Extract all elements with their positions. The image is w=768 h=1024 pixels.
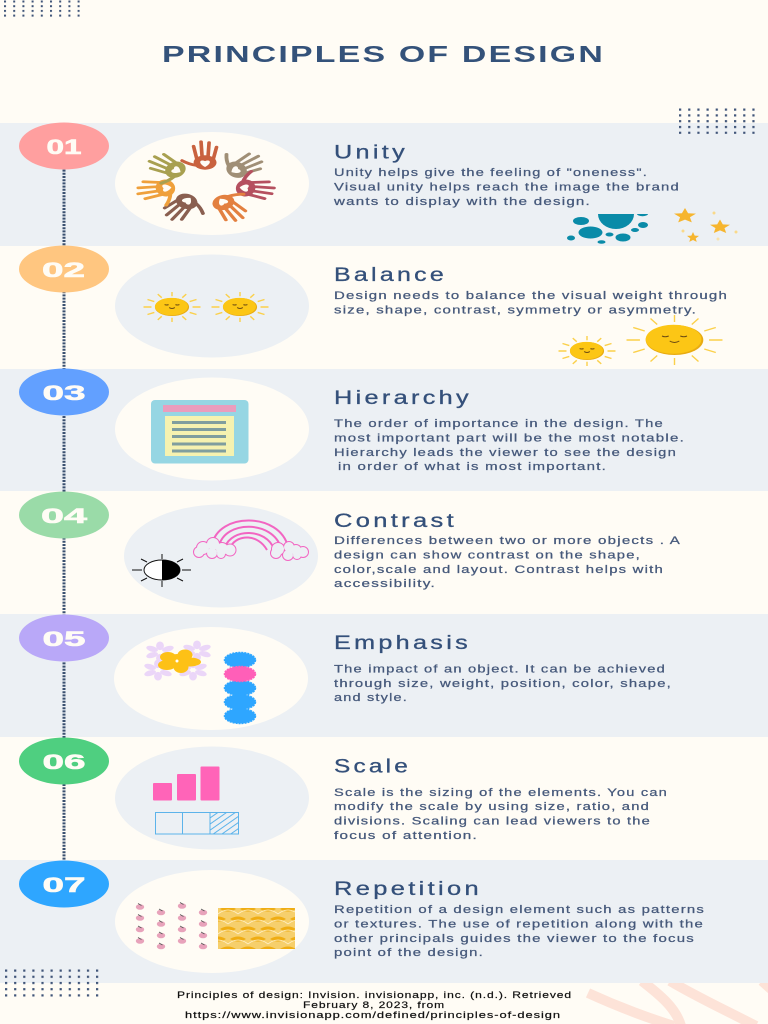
text block: Balance: size, shape, contrast, symmetry or asymmetry.	[334, 304, 697, 316]
dot grid top left	[4, 0, 81, 18]
decoration: brush strokes	[588, 981, 768, 1024]
row band: Hierarchy	[0, 369, 768, 491]
step badge 07	[19, 860, 109, 908]
illustration: scale bars and divided bar	[115, 746, 309, 850]
step badge 02: 02	[42, 259, 85, 282]
step badge 06	[19, 738, 109, 784]
text block: Scale: focus of attention.	[334, 830, 478, 842]
text block: Repetition: or textures. The use of repetition along with the	[334, 918, 704, 930]
row band: Repetition	[0, 860, 768, 983]
text block: Unity: Unity	[334, 142, 408, 164]
text block: Repetition: other principals guides the viewer to the focus	[334, 933, 695, 945]
text block: Contrast	[334, 511, 681, 590]
text block: Scale: divisions. Scaling can lead viewers to the	[334, 816, 651, 828]
text block: Balance: Design needs to balance the visual weight through	[334, 290, 728, 302]
footer citation: Principles of design: Invision. invisionapp, inc. (n.d.). Retrieved	[177, 990, 572, 1001]
title: PRINCIPLES OF DESIGN	[162, 41, 605, 67]
step badge 03	[19, 368, 109, 416]
text block: Scale: modify the scale by using size, ratio, and	[334, 801, 650, 813]
text block: Unity: Unity helps give the feeling of "oneness".	[334, 167, 648, 179]
text block: Hierarchy: Hierarchy	[334, 388, 472, 409]
text block: Unity: wants to display with the design.	[333, 196, 591, 208]
text block: Hierarchy: most important part will be the most notable.	[334, 432, 685, 444]
row band: Emphasis	[0, 614, 768, 737]
decoration: teal bubbles	[567, 214, 648, 244]
footer citation	[177, 990, 572, 1021]
step badge 01: 01	[46, 136, 82, 159]
text block: Repetition: Repetition of a design element such as patterns	[334, 904, 705, 916]
text block: Hierarchy: The order of importance in the design. The	[334, 418, 664, 430]
text block: Emphasis: The impact of an object. It can be achieved	[334, 664, 666, 676]
text block: Unity	[333, 142, 680, 208]
text block: Emphasis	[334, 633, 672, 704]
step badge 05	[19, 614, 109, 662]
text block: Repetition: point of the design.	[334, 947, 484, 959]
text block: Emphasis: through size, weight, position, color, shape,	[334, 678, 672, 690]
decoration: two suns of different size	[558, 315, 722, 366]
decoration: gold stars	[674, 208, 738, 242]
step badge 02	[19, 246, 109, 292]
text block: Contrast: accessibility.	[334, 578, 436, 590]
step badge 05: 05	[42, 628, 86, 651]
step badge 03: 03	[42, 382, 86, 405]
illustration: ring of hands	[115, 132, 309, 235]
text block: Repetition	[334, 879, 705, 959]
step badge 04: 04	[41, 505, 88, 528]
illustration: document hierarchy	[115, 378, 309, 480]
step badge 01	[19, 122, 109, 170]
text block: Repetition: Repetition	[334, 879, 482, 900]
text block: Unity: Visual unity helps reach the image the brand	[334, 182, 680, 194]
illustration: contrast sun and rainbow	[124, 504, 318, 608]
dot grid bottom left	[5, 969, 99, 997]
text block: Scale: Scale is the sizing of the elements. You can	[334, 787, 668, 799]
timeline dotted line	[62, 160, 66, 870]
text block: Contrast: Contrast	[334, 511, 457, 532]
text block: Emphasis: Emphasis	[334, 633, 471, 654]
text block: Scale: Scale	[334, 756, 411, 778]
footer citation: https://www.invisionapp.com/defined/principles-of-design	[185, 1010, 561, 1021]
step badge 06: 06	[42, 751, 86, 774]
text block: Hierarchy: in order of what is most important.	[338, 461, 607, 473]
text block: Balance: Balance	[334, 265, 447, 286]
text block: Contrast: Differences between two or more objects . A	[334, 535, 681, 547]
text block: Hierarchy	[334, 388, 685, 473]
dot grid top right	[679, 108, 755, 134]
text block: Hierarchy: Hierarchy leads the viewer to see the design	[334, 447, 677, 459]
text block: Contrast: color,scale and layout. Contrast helps with	[334, 564, 664, 576]
text block: Emphasis: and style.	[334, 692, 408, 704]
text block: Balance	[334, 265, 728, 316]
text block: Contrast: design can show contrast on the shape,	[334, 550, 641, 562]
row band: Unity	[0, 123, 768, 246]
step badge 07: 07	[42, 874, 86, 897]
illustration: emphasised flower and dots	[114, 627, 308, 730]
step badge 04	[19, 492, 109, 538]
illustration: repeated apples and wave pattern	[115, 870, 309, 973]
illustration: two matching suns	[115, 254, 309, 358]
footer citation: February 8, 2023, from	[303, 1000, 445, 1011]
text block: Scale	[334, 756, 668, 842]
